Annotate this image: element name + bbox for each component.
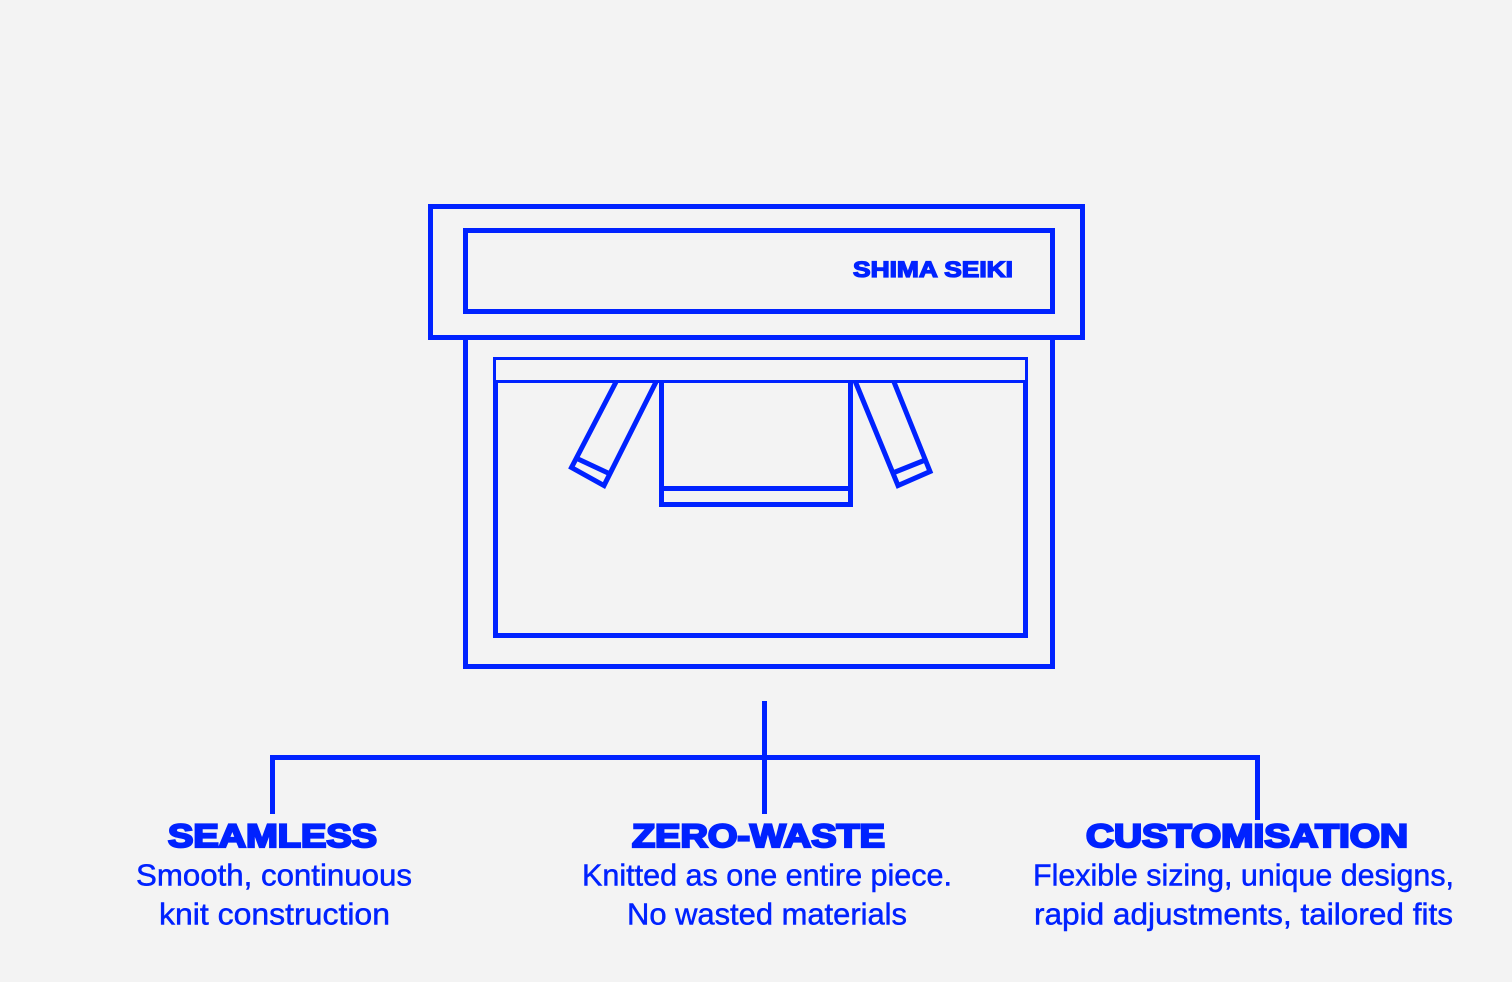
sweater torso <box>662 382 850 504</box>
feature: seamless <box>136 818 412 932</box>
machine window <box>494 358 1026 636</box>
brand label: SHIMA SEIKI <box>853 257 1013 282</box>
description: customisation: rapid adjustments, tailored fits <box>1034 896 1453 932</box>
description: zero-waste: Knitted as one entire piece. <box>582 858 952 892</box>
feature: zero-waste <box>582 818 952 932</box>
machine body <box>466 337 1052 666</box>
description: seamless <box>136 858 412 932</box>
machine top housing <box>430 206 1082 338</box>
heading: seamless: SEAMLESS <box>168 818 377 854</box>
description: customisation <box>1033 858 1454 932</box>
heading: zero-waste: ZERO-WASTE <box>632 818 885 854</box>
description: zero-waste: No wasted materials <box>627 896 907 932</box>
knitted sweater <box>572 382 930 504</box>
description: zero-waste <box>582 858 952 932</box>
description: customisation: Flexible sizing, unique designs, <box>1033 858 1454 892</box>
description: seamless: knit construction <box>159 896 390 932</box>
feature: customisation <box>1033 818 1454 932</box>
left sleeve <box>572 382 656 486</box>
machine control panel <box>466 230 1052 312</box>
heading: customisation: CUSTOMISATION <box>1086 818 1408 854</box>
connector lines <box>272 701 1258 820</box>
machine illustration <box>430 206 1082 666</box>
description: seamless: Smooth, continuous <box>136 858 412 892</box>
right sleeve <box>856 382 930 486</box>
